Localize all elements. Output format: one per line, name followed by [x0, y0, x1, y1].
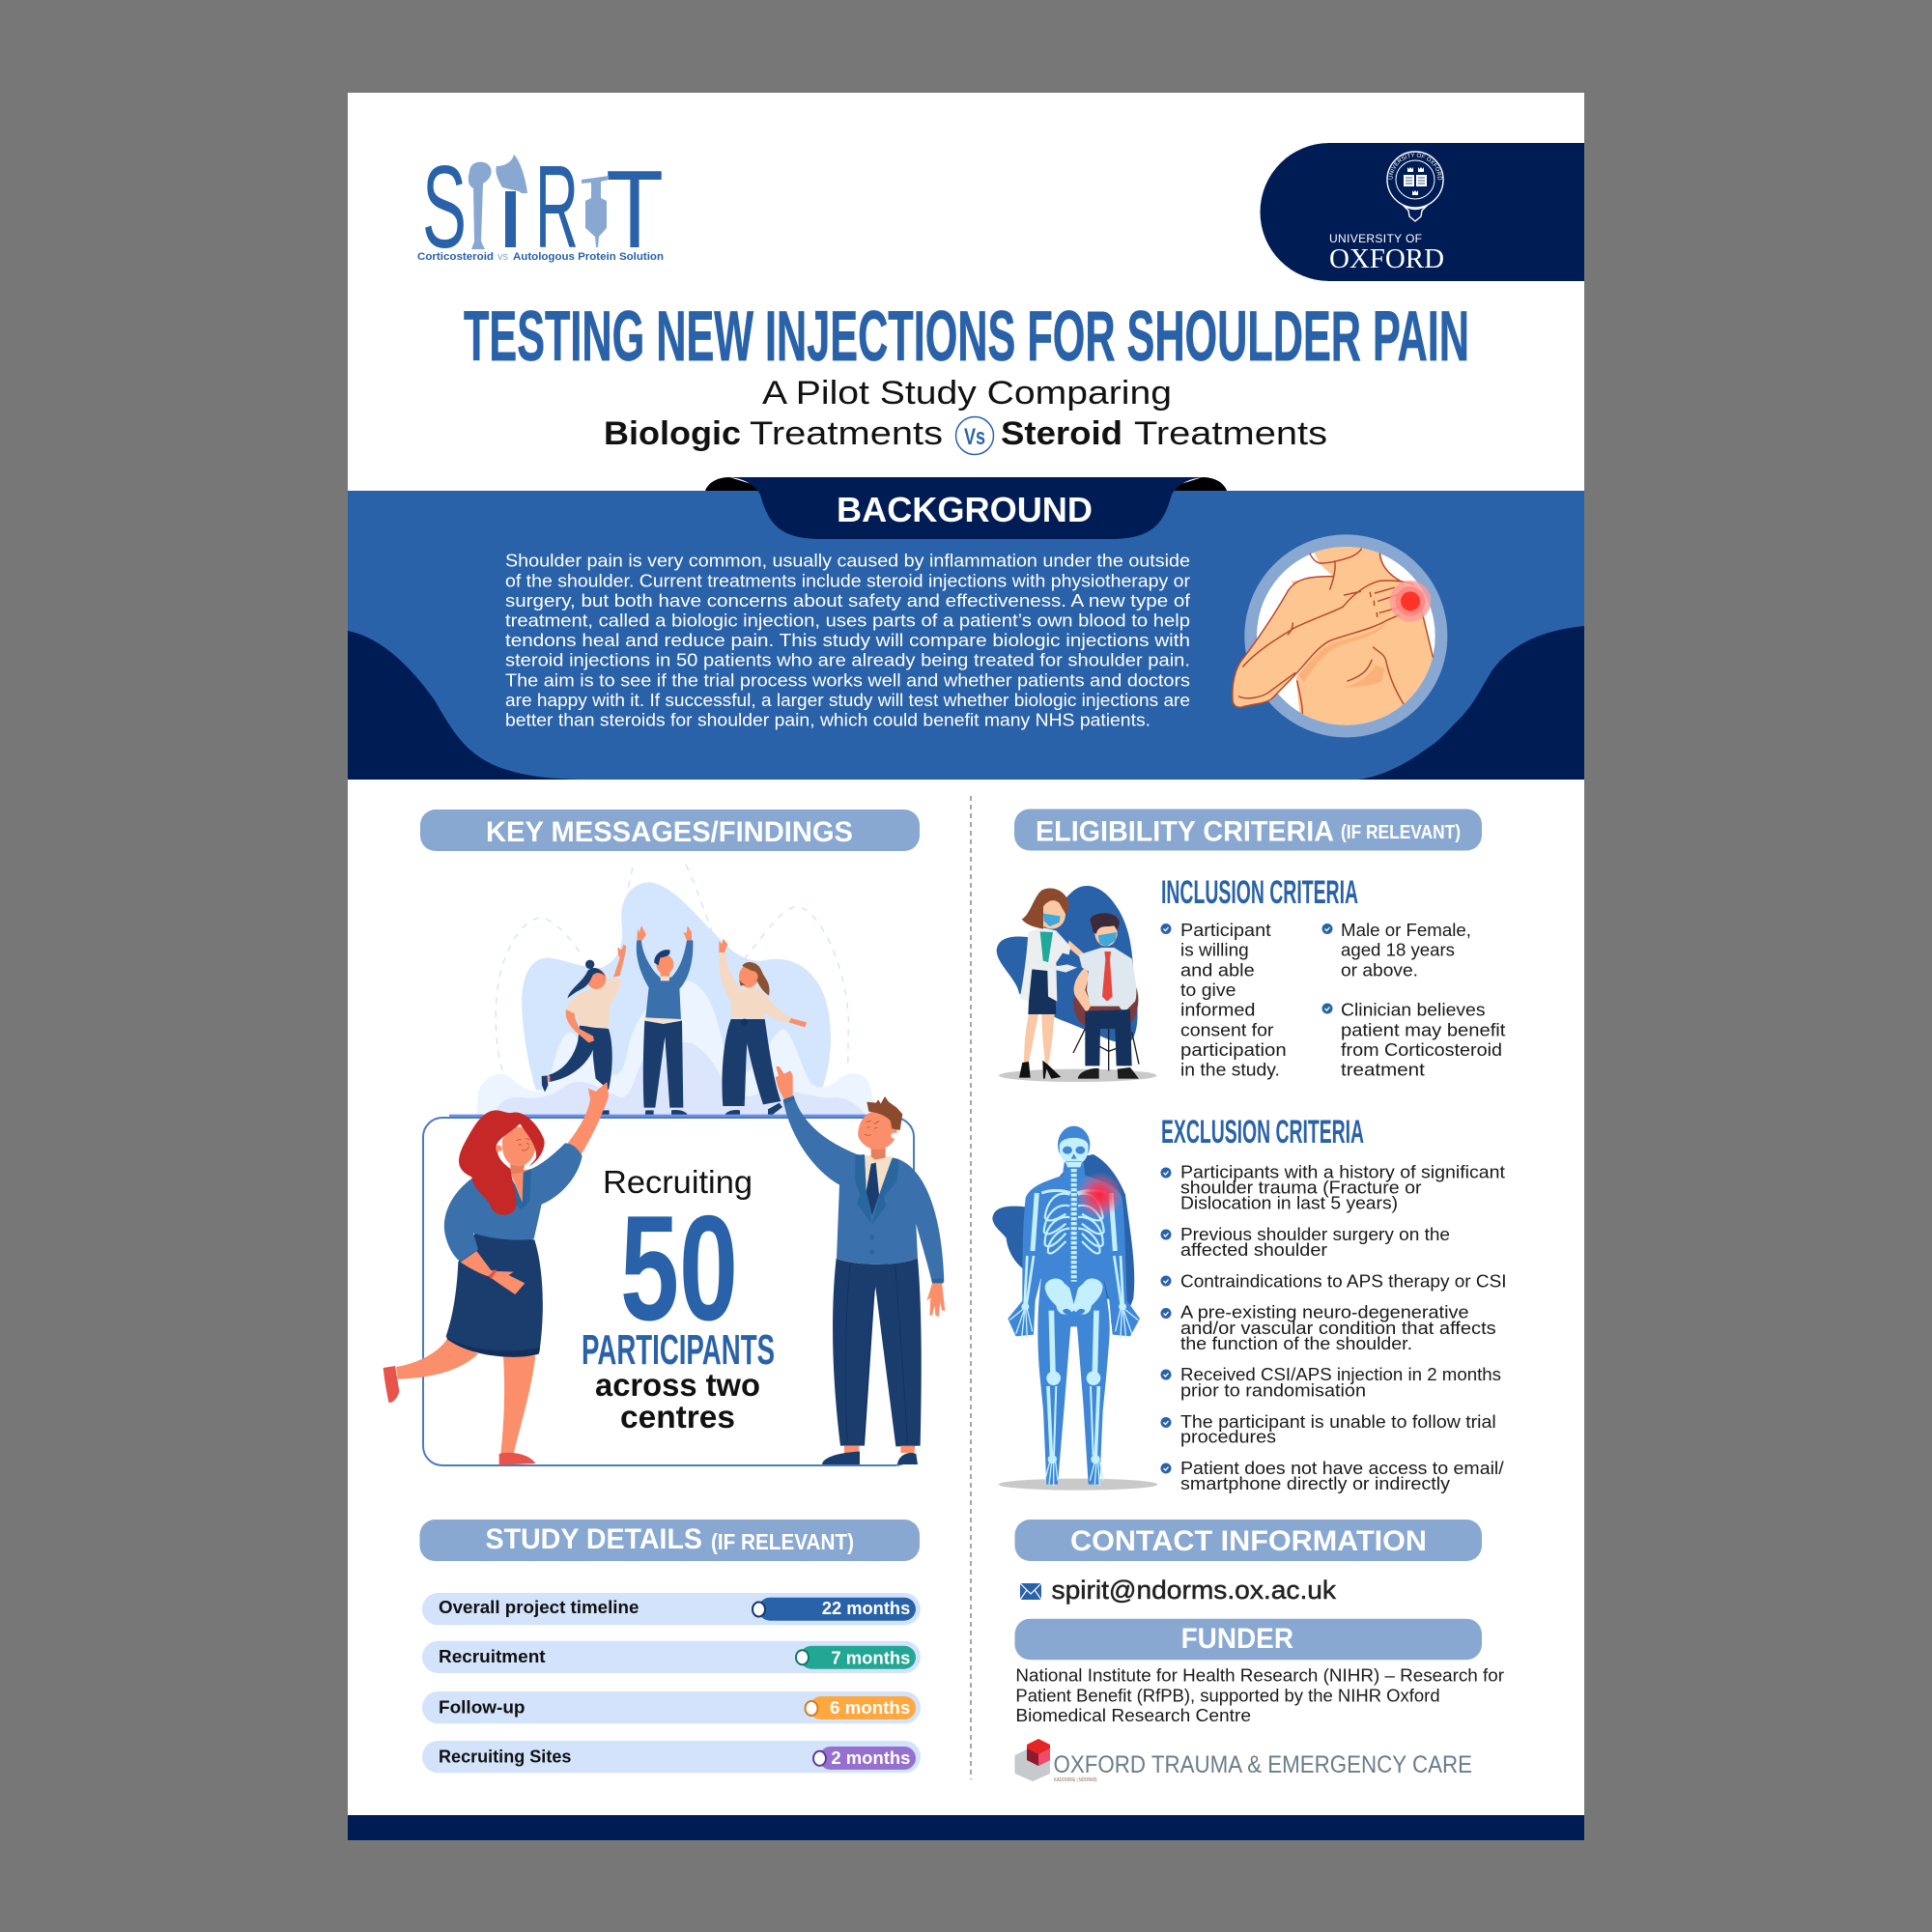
list: exclusion criteria: Participants with a history of significant	[1180, 1161, 1505, 1182]
list: exclusion criteria: smartphone directly or indirectly	[1180, 1473, 1451, 1493]
figure: large man	[776, 1066, 945, 1464]
timeline row: overall project	[422, 1593, 921, 1625]
subtitle: Steroid	[1001, 415, 1122, 452]
footer bar	[348, 1815, 1584, 1840]
poster	[348, 93, 1584, 1840]
text block: background paragraph	[505, 551, 1191, 730]
heading tab: background: BACKGROUND	[837, 490, 1093, 529]
list: inclusion right: Clinician believes	[1341, 1000, 1486, 1020]
list: exclusion criteria: Dislocation in last 5 years)	[1180, 1193, 1398, 1213]
list: exclusion criteria: Patient does not have access to email/	[1180, 1458, 1505, 1478]
list: exclusion criteria: Previous shoulder surgery on the	[1180, 1224, 1450, 1244]
logo: Oxford Trauma & Emergency Care: KADOORIE | NDORMS	[1054, 1777, 1097, 1783]
list: inclusion left: is willing	[1180, 940, 1249, 960]
logo: Oxford Trauma & Emergency Care	[1014, 1739, 1472, 1783]
icon: versus badge	[956, 417, 993, 454]
subtitle: Treatments	[750, 415, 943, 452]
list: exclusion criteria: Contraindications to APS therapy or CSI	[1180, 1271, 1507, 1291]
list: inclusion left: participation	[1180, 1039, 1287, 1060]
list: inclusion right: patient may benefit	[1341, 1019, 1505, 1039]
recruiting card	[423, 1118, 914, 1465]
list: inclusion left	[1161, 920, 1287, 1080]
subtitle: Treatments	[1134, 415, 1327, 452]
text block: background paragraph: of the shoulder. Current treatments include steroid injections with physiotherapy or	[505, 570, 1190, 590]
timeline row: recruitment	[422, 1641, 921, 1673]
list: inclusion left: consent for	[1180, 1019, 1273, 1039]
heading: study details: STUDY DETAILS	[485, 1523, 702, 1555]
list: exclusion criteria: A pre-existing neuro-degenerative	[1180, 1302, 1468, 1322]
icon: painful shoulder	[1233, 534, 1447, 737]
text block: background paragraph: are happy with it. If successful, a larger study will test whether biologic injections are	[505, 690, 1190, 710]
list: inclusion right: from Corticosteroid	[1341, 1039, 1502, 1060]
text: recruiting 50 participants: PARTICIPANTS	[582, 1326, 775, 1374]
logo subtitle	[417, 251, 664, 263]
text block: funder: Biomedical Research Centre	[1015, 1705, 1251, 1725]
list: exclusion criteria: the function of the shoulder.	[1180, 1333, 1412, 1353]
list: inclusion right	[1321, 920, 1505, 1080]
list: inclusion right: or above.	[1341, 959, 1418, 980]
heading: inclusion criteria: INCLUSION CRITERIA	[1161, 874, 1358, 911]
text: recruiting 50 participants: across two	[595, 1367, 760, 1403]
text block: background paragraph: tendons heal and reduce pain. This study will compare biologic injections with	[505, 630, 1190, 650]
list: exclusion criteria: and/or vascular condition that affects	[1180, 1318, 1496, 1338]
text block: background paragraph: steroid injections in 50 patients who are already being treated for shoulder pain.	[505, 650, 1190, 670]
list: exclusion criteria: shoulder trauma (Fracture or	[1180, 1178, 1422, 1198]
heading: study details: (IF RELEVANT)	[711, 1529, 854, 1554]
text block: background paragraph: better than steroids for shoulder pain, which could benefit many NHS patients.	[505, 709, 1151, 730]
illustration: celebrating team	[449, 865, 877, 1117]
divider	[970, 796, 972, 1779]
illustration: skeleton with shoulder pain	[992, 1126, 1157, 1491]
timeline row: follow-up: 6 months	[830, 1698, 910, 1718]
icon: Oxford crest: UNIVERSITY OF OXFORD	[1388, 153, 1442, 180]
panel: University of Oxford	[1260, 143, 1584, 281]
heading: contact information	[1014, 1520, 1482, 1561]
figure: large woman	[384, 1082, 609, 1465]
timeline row: recruiting sites: Recruiting Sites	[439, 1747, 571, 1766]
list: exclusion criteria: procedures	[1180, 1427, 1276, 1447]
heading: study details	[419, 1520, 920, 1561]
text block: background paragraph: surgery, but both have concerns about safety and effectiveness. A new type of	[505, 590, 1191, 611]
heading: eligibility criteria: ELIGIBILITY CRITERIA	[1036, 815, 1334, 848]
text block: funder: National Institute for Health Research (NIHR) – Research for	[1015, 1665, 1504, 1686]
timeline row: recruitment: 7 months	[831, 1649, 910, 1668]
timeline row: recruiting sites	[422, 1741, 921, 1773]
text block: background paragraph: treatment, called a biologic injection, uses parts of a patient’s own blood to help	[505, 611, 1190, 630]
icon: Oxford crest	[1386, 151, 1444, 222]
list: inclusion left: informed	[1180, 1000, 1256, 1020]
list: exclusion criteria: affected shoulder	[1180, 1239, 1327, 1260]
logo: SPIRIT	[417, 141, 664, 272]
figure: woman right	[719, 939, 807, 1116]
figure: woman left	[542, 944, 626, 1116]
timeline row: overall project: Overall project timeline	[439, 1598, 639, 1617]
heading: eligibility criteria	[1014, 810, 1482, 850]
icon: versus badge: Vs	[964, 424, 985, 450]
subtitle: A Pilot Study Comparing	[762, 375, 1172, 412]
text: recruiting 50 participants: 50	[620, 1184, 738, 1351]
logo: SPIRIT: R	[535, 141, 579, 272]
subtitle: Biologic	[604, 415, 741, 452]
illustration: doctor giving injection	[997, 886, 1156, 1082]
text: recruiting 50 participants: Recruiting	[603, 1164, 753, 1200]
heading: funder	[1014, 1619, 1482, 1660]
list: inclusion right: aged 18 years	[1341, 940, 1455, 960]
logo: SPIRIT: S	[422, 141, 467, 272]
subtitle	[604, 375, 1327, 454]
heading tab: background	[726, 477, 1208, 539]
list: inclusion left: Participant	[1180, 920, 1271, 940]
panel: University of Oxford: UNIVERSITY OF	[1329, 232, 1422, 245]
list: inclusion left: and able	[1180, 959, 1255, 980]
heading: contact information: CONTACT INFORMATION	[1070, 1525, 1427, 1557]
text: recruiting 50 participants	[582, 1164, 775, 1435]
heading: key messages/findings: KEY MESSAGES/FINDINGS	[486, 816, 853, 848]
logo: SPIRIT: T	[606, 149, 664, 271]
heading: funder: FUNDER	[1181, 1623, 1293, 1655]
panel: University of Oxford: OXFORD	[1329, 244, 1444, 274]
list: exclusion criteria	[1161, 1161, 1507, 1493]
text: recruiting 50 participants: centres	[620, 1399, 735, 1435]
timeline row: follow-up: Follow-up	[439, 1698, 526, 1718]
timeline row: overall project: 22 months	[822, 1599, 910, 1618]
heading: eligibility criteria: (IF RELEVANT)	[1341, 822, 1461, 843]
list: exclusion criteria: The participant is unable to follow trial	[1180, 1411, 1496, 1432]
list: inclusion left: in the study.	[1180, 1060, 1280, 1080]
list: exclusion criteria: prior to randomisation	[1180, 1379, 1366, 1400]
text block: background paragraph: The aim is to see if the trial process works well and whether patients and doctors	[505, 669, 1190, 690]
logo subtitle: vs	[497, 251, 508, 263]
figure: man middle	[637, 925, 693, 1116]
timeline row: recruiting sites: 2 months	[831, 1748, 910, 1768]
text block: background paragraph: Shoulder pain is very common, usually caused by inflammation under the outside	[505, 551, 1190, 571]
text block: funder	[1015, 1665, 1504, 1725]
icon: envelope	[1020, 1583, 1041, 1600]
contact email: spirit@ndorms.ox.ac.uk	[1051, 1576, 1337, 1605]
logo subtitle: Corticosteroid	[417, 251, 494, 263]
panel: background	[348, 477, 1584, 780]
heading: exclusion criteria: EXCLUSION CRITERIA	[1161, 1114, 1364, 1151]
list: exclusion criteria: Received CSI/APS injection in 2 months	[1180, 1364, 1501, 1384]
timeline row: follow-up	[422, 1691, 921, 1723]
text block: funder: Patient Benefit (RfPB), supported by the NIHR Oxford	[1015, 1685, 1440, 1705]
heading: key messages/findings	[420, 810, 920, 851]
list: inclusion left: to give	[1180, 980, 1236, 1000]
logo subtitle: Autologous Protein Solution	[513, 251, 664, 263]
list: inclusion right: treatment	[1341, 1060, 1425, 1080]
logo: Oxford Trauma & Emergency Care: OXFORD TRAUMA & EMERGENCY CARE	[1053, 1751, 1472, 1778]
platform line	[449, 1111, 867, 1122]
list: inclusion right: Male or Female,	[1341, 920, 1471, 940]
timeline row: recruitment: Recruitment	[439, 1647, 546, 1666]
